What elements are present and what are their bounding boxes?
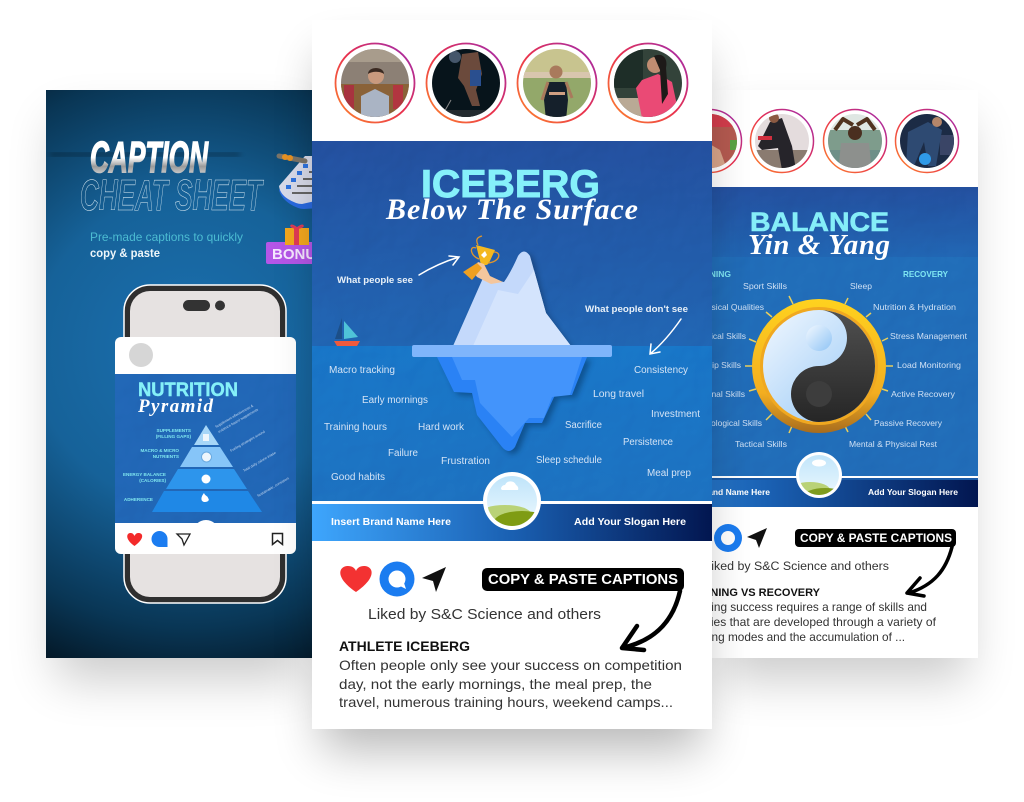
badge: bonus: [266, 224, 312, 264]
pyramid chart: evidence-based supplements: [218, 408, 259, 434]
icon: checklist and pen: [276, 154, 312, 209]
caption text: training vs recovery: [682, 559, 937, 644]
story: athlete jump: [426, 44, 506, 122]
labels: hidden factors left: Macro tracking: [329, 365, 395, 376]
callout: copy and paste captions: [482, 568, 684, 591]
label: what people see: What people see: [337, 275, 413, 285]
title: caption cheat sheet: [50, 140, 264, 211]
column heads: [690, 269, 948, 279]
callout: copy and paste captions: [795, 529, 956, 547]
story: coach: [336, 44, 414, 122]
labels: hidden factors left: Failure: [388, 448, 418, 459]
pyramid chart: Sustainable, consistent: [256, 476, 290, 498]
labels: hidden factors right: [536, 365, 700, 479]
story: woman in pink jacket: [608, 44, 688, 122]
footer bar: balance: Insert Brand Name Here: [673, 487, 770, 497]
story circles: right: [712, 108, 960, 174]
icon: heart small: [127, 533, 142, 546]
heading: iceberg: Below The Surface: [385, 193, 638, 226]
icon: send: [422, 567, 446, 592]
icon: comment small: [152, 531, 168, 547]
labels: hidden factors right: Consistency: [634, 365, 688, 376]
background shadows: [56, 120, 968, 680]
icon: bookmark small: [272, 534, 282, 544]
caption text: athlete iceberg: day, not the early mornings, the meal prep, the: [339, 676, 652, 692]
labels: hidden factors right: Persistence: [623, 437, 673, 448]
pyramid chart: SUPPLEMENTS: [157, 428, 191, 433]
caption text: training vs recovery: Liked by S&C Science and others: [704, 559, 889, 573]
text: liked by: Liked by S&C Science and others: [368, 606, 601, 623]
footer bar: iceberg: Add Your Slogan Here: [574, 517, 686, 528]
story circles: center: [336, 44, 688, 122]
heading: nutrition pyramid: [137, 380, 238, 417]
labels: hidden factors left: Hard work: [418, 422, 465, 433]
labels: hidden factors right: Investment: [651, 409, 700, 420]
callout: copy and paste captions: COPY & PASTE CAPTIONS: [488, 572, 678, 588]
labels: hidden factors right: Sleep schedule: [536, 455, 602, 466]
labels: recovery skills: Stress Management: [890, 331, 968, 341]
heading: balance: Yin & Yang: [748, 229, 890, 261]
pyramid chart: ENERGY BALANCE: [123, 472, 166, 477]
title: caption cheat sheet: CAPTION: [90, 133, 209, 182]
labels: recovery skills: Sleep: [850, 281, 872, 291]
labels: training skills: Leadership Skills: [677, 360, 741, 370]
label: what people don't see: What people don't see: [585, 304, 688, 314]
subtitle: Pre-made captions to quickly: [90, 230, 243, 244]
labels: training skills: Personal Skills: [689, 389, 745, 399]
center card shadow: [322, 55, 702, 750]
iceberg below water: [412, 345, 612, 454]
panel: balance yin and yang card: [712, 98, 978, 658]
labels: hidden factors right: Sacrifice: [565, 420, 602, 431]
pyramid chart: NUTRIENTS: [153, 454, 179, 459]
iceberg above water: [453, 252, 573, 348]
labels: hidden factors left: Early mornings: [362, 395, 428, 406]
subtitle: copy & paste: [90, 246, 160, 260]
icon: send small: [177, 534, 190, 545]
caption text: training vs recovery: qualities that are developed through a variety of: [682, 615, 937, 629]
banner: iceberg infographic: [312, 141, 712, 541]
labels: training skills: Sport Skills: [743, 281, 787, 291]
story: runner in park: [518, 44, 596, 122]
callout: copy and paste captions: COPY & PASTE CAPTIONS: [800, 533, 952, 545]
banner: balance infographic: [712, 187, 978, 507]
icon: comment bubble: [714, 524, 742, 552]
labels: recovery skills: Mental & Physical Rest: [849, 439, 938, 449]
arrow: what people don't see: [650, 319, 681, 354]
labels: recovery skills: Load Monitoring: [897, 360, 961, 370]
labels: training skills: Psychological Skills: [688, 418, 762, 428]
arrow: what people see: [419, 256, 459, 275]
phone mockup: [124, 285, 286, 603]
heading: balance: BALANCE: [750, 207, 889, 237]
yin yang dial: [745, 296, 893, 433]
panel: iceberg card: [312, 20, 712, 729]
column heads: TRAINING: [690, 269, 731, 279]
caption text: training vs recovery: Training success requires a range of skills and: [685, 600, 927, 614]
title: caption cheat sheet: CHEAT SHEET: [80, 171, 264, 220]
badge: bonus: BONUS: [272, 246, 326, 263]
heading: nutrition pyramid: Pyramid: [137, 396, 214, 417]
heading: nutrition pyramid: NUTRITION: [138, 380, 238, 401]
heading: balance: [748, 207, 890, 261]
caption text: training vs recovery: training modes and the accumulation of ...: [686, 630, 905, 644]
icon: heart: [340, 566, 372, 592]
labels: recovery skills: Active Recovery: [891, 389, 956, 399]
footer bar: balance: Add Your Slogan Here: [868, 487, 958, 497]
icon: comment bubble: [380, 562, 414, 596]
pyramid chart: ADHERENCE: [124, 497, 153, 502]
pyramid chart: (FILLING GAPS): [156, 434, 191, 439]
labels: recovery skills: Nutrition & Hydration: [873, 302, 956, 312]
labels: hidden factors left: Training hours: [324, 422, 387, 433]
icon: sailboat: [334, 318, 360, 346]
pyramid chart: Supplement effectiveness &: [214, 403, 255, 429]
pyramid chart: Fueling strategies around: [230, 430, 266, 453]
labels: recovery skills: Passive Recovery: [874, 418, 943, 428]
column heads: RECOVERY: [903, 269, 948, 279]
labels: hidden factors left: [324, 365, 490, 483]
labels: hidden factors left: Good habits: [331, 472, 385, 483]
logo placeholder: balance: [796, 452, 842, 498]
arrow: caption callout: [907, 547, 952, 596]
labels: hidden factors right: Meal prep: [647, 468, 691, 479]
panel: caption cheat sheet card: [46, 90, 326, 658]
footer bar: iceberg: [312, 501, 712, 541]
caption text: athlete iceberg: [339, 638, 682, 710]
heading: iceberg: ICEBERG: [421, 163, 600, 206]
heading: iceberg: [385, 163, 638, 226]
labels: training skills: Physical Qualities: [697, 302, 764, 312]
pyramid chart: (CALORIES): [139, 478, 166, 483]
caption text: training vs recovery: TRAINING VS RECOVERY: [685, 587, 821, 599]
footer bar: balance: [560, 476, 978, 507]
labels: recovery skills: [849, 281, 968, 449]
labels: hidden factors right: Long travel: [593, 389, 644, 400]
pyramid chart: [123, 403, 290, 512]
subtitle: [90, 232, 243, 260]
arrow: caption callout: [622, 591, 680, 650]
labels: training skills: Technical Skills: [688, 331, 746, 341]
icon: trophy and hand: [463, 236, 503, 284]
footer bar: iceberg: Insert Brand Name Here: [331, 517, 451, 528]
icon: send: [747, 528, 767, 548]
pyramid chart: Total daily calorie intake: [242, 451, 277, 473]
caption text: athlete iceberg: ATHLETE ICEBERG: [339, 638, 470, 654]
pyramid chart: MACRO & MICRO: [140, 448, 179, 453]
labels: hidden factors left: Frustration: [441, 456, 490, 467]
logo placeholder: iceberg: [483, 472, 541, 530]
caption text: athlete iceberg: travel, numerous training hours, weekend camps...: [339, 694, 673, 710]
labels: training skills: Tactical Skills: [735, 439, 787, 449]
labels: training skills: [677, 281, 787, 449]
instagram post: nutrition pyramid: [115, 337, 296, 554]
caption text: athlete iceberg: Often people only see your success on competition: [339, 657, 682, 673]
